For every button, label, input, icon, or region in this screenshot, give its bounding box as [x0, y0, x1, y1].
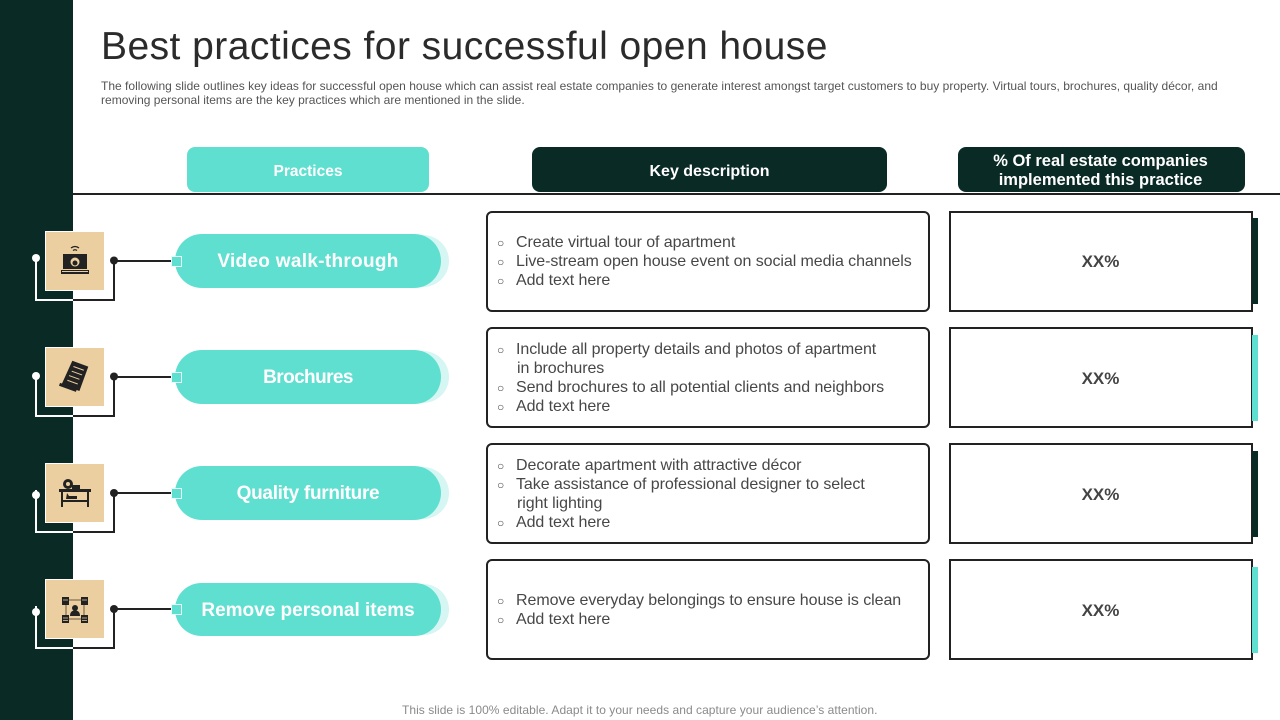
connectors: [32, 254, 171, 649]
percent box 4: XX%: [1082, 601, 1119, 620]
connector square: [171, 372, 182, 383]
side bar 1: [1252, 218, 1258, 304]
header: percent of companies: implemented this practice: [999, 171, 1202, 189]
header: percent of companies: [958, 147, 1245, 192]
pill: video walk-through: Video walk-through: [217, 251, 399, 272]
description box 4: [486, 559, 930, 660]
pill: brochures: [175, 350, 441, 404]
bullets 4: ○: [497, 594, 504, 608]
footer note: This slide is 100% editable. Adapt it to your needs and capture your audience’s attention.: [402, 703, 877, 717]
bullets 3: ○: [497, 478, 504, 492]
description box 1: [486, 211, 930, 312]
bullets 1: Live-stream open house event on social media channels: [516, 253, 912, 270]
bullets 1: ○: [497, 236, 504, 250]
bullets 2: Add text here: [516, 398, 610, 415]
intro text: The following slide outlines key ideas for successful open house which can assist real estate companies to generate interest amongst target customers to buy property. Virtual tours, brochures, quality décor, and: [101, 79, 1218, 93]
bullets 4: Remove everyday belongings to ensure house is clean: [516, 592, 901, 609]
bullets 1: [497, 234, 912, 289]
percent box 2: [949, 327, 1253, 428]
icon: brochure scroll: [46, 348, 104, 406]
header: practices: Practices: [274, 163, 342, 180]
side bar 3: [1252, 451, 1258, 537]
bullets 3: ○: [497, 516, 504, 530]
header: key description: [532, 147, 887, 192]
intro text: [101, 79, 1218, 107]
bullets 1: Create virtual tour of apartment: [516, 234, 735, 251]
pill: video walk-through: [175, 234, 441, 288]
bullets 2: in brochures: [517, 360, 604, 377]
bullets 2: ○: [497, 343, 504, 357]
percent box 2: XX%: [1082, 369, 1119, 388]
side bar 2: [1252, 335, 1258, 421]
bullets 1: Add text here: [516, 272, 610, 289]
left sidebar: [0, 0, 73, 720]
icon: desk furniture: [46, 464, 104, 522]
bullets 1: ○: [497, 255, 504, 269]
icon: laptop with wifi: [46, 232, 104, 290]
pill: remove personal items: Remove personal items: [201, 600, 415, 621]
bullets 4: ○: [497, 613, 504, 627]
pill: brochures: Brochures: [263, 367, 353, 388]
bullets 3: ○: [497, 459, 504, 473]
pill: quality furniture: Quality furniture: [237, 483, 379, 504]
percent box 4: [949, 559, 1253, 660]
description box 2: [486, 327, 930, 428]
connector square: [171, 488, 182, 499]
bullets 4: Add text here: [516, 611, 610, 628]
header: percent of companies: % Of real estate companies: [993, 152, 1208, 170]
bullets 1: ○: [497, 274, 504, 288]
side bar 4: [1252, 567, 1258, 653]
bullets 3: right lighting: [517, 495, 602, 512]
bullets 2: [497, 341, 884, 415]
connector square: [171, 256, 182, 267]
percent box 3: XX%: [1082, 485, 1119, 504]
bullets 3: Take assistance of professional designer to select: [516, 476, 865, 493]
icon: people network: [46, 580, 104, 638]
bullets 4: [497, 592, 901, 628]
pill: quality furniture: [175, 466, 441, 520]
bullets 2: Include all property details and photos of apartment: [516, 341, 876, 358]
bullets 3: [497, 457, 865, 531]
header: practices: [187, 147, 429, 192]
bullets 2: ○: [497, 381, 504, 395]
percent box 1: [949, 211, 1253, 312]
bullets 2: Send brochures to all potential clients and neighbors: [516, 379, 884, 396]
title: Best practices for successful open house: [101, 25, 828, 68]
bullets 3: Add text here: [516, 514, 610, 531]
pill: remove personal items: [175, 583, 441, 636]
header: key description: Key description: [649, 163, 770, 180]
bullets 3: Decorate apartment with attractive décor: [516, 457, 801, 474]
percent box 3: [949, 443, 1253, 544]
percent box 1: XX%: [1082, 252, 1119, 271]
description box 3: [486, 443, 930, 544]
bullets 2: ○: [497, 400, 504, 414]
intro text: removing personal items are the key practices which are mentioned in the slide.: [101, 93, 525, 107]
connector square: [171, 604, 182, 615]
